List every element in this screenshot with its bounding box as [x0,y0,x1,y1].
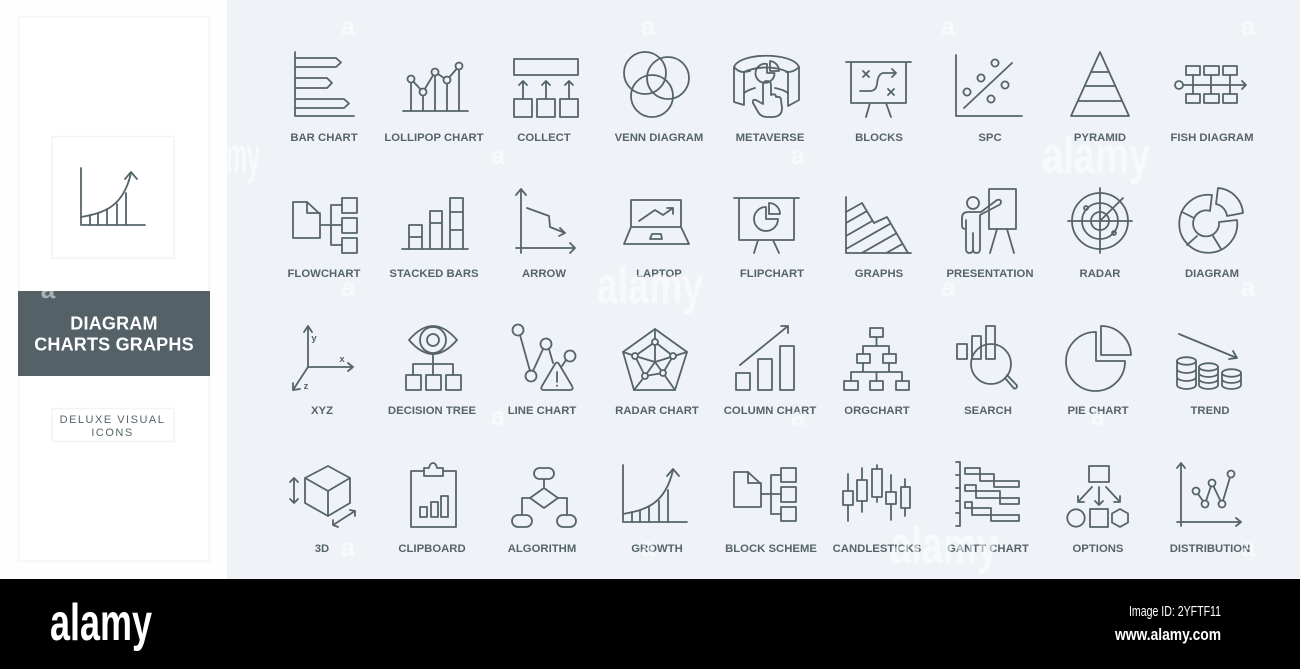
icon: trend [1177,334,1241,417]
icon: pyramid: PYRAMID [1074,132,1126,144]
watermark overlay: a [1091,401,1106,431]
icon: xyz: XYZ [311,405,333,417]
icon: flowchart [288,198,361,280]
icon: spc: SPC [978,132,1002,144]
icon: growth: GROWTH [631,543,683,555]
icon: fish diagram [1170,66,1254,144]
icon: venn diagram: VENN DIAGRAM [615,132,703,144]
icon: trend: TREND [1190,405,1230,417]
watermark overlay: a [641,11,656,41]
watermark overlay: a [941,11,956,41]
icon: stacked bars: STACKED BARS [389,268,479,280]
icon: flipchart [734,198,804,280]
icon: growth [623,465,687,555]
watermark overlay [42,275,1250,552]
watermark overlay: a [491,140,506,170]
icon: xyz: x [339,354,345,365]
icon: stacked bars [389,198,479,280]
icon: xyz: y [311,333,317,344]
website: www.alamy.com [1114,626,1221,644]
icon: collect [514,59,578,144]
icon: orgchart: ORGCHART [844,405,910,417]
watermark overlay: my [226,127,260,185]
subtitle box: ICONS [91,427,134,439]
icon: options [1067,466,1128,555]
subtitle box [52,408,174,442]
icon: collect: COLLECT [517,132,571,144]
subtitle box: DELUXE VISUAL [60,414,165,426]
icon: laptop [624,200,689,280]
icon: distribution [1170,463,1250,555]
watermark overlay: a [1241,532,1256,562]
watermark overlay: a [641,532,656,562]
watermark overlay: a [491,401,506,431]
icon: line chart with warning [508,324,576,417]
icon: arrow: ARROW [522,268,566,280]
icon card: growth chart [52,136,174,258]
icon: arrow [516,189,575,280]
icon: blocks [846,62,911,144]
icon: laptop: LAPTOP [636,268,682,280]
icon: flipchart: FLIPCHART [740,268,804,280]
icon: distribution: DISTRIBUTION [1170,543,1250,555]
icon: block scheme [725,468,817,555]
icon: graphs: GRAPHS [855,268,904,280]
icon: search [957,326,1017,417]
icon: options: OPTIONS [1073,543,1124,555]
icon: radar: RADAR [1080,268,1120,280]
image id: Image ID: 2YFTF11 [1129,604,1221,620]
watermark overlay: a [1241,272,1256,302]
icon: candlesticks: CANDLESTICKS [833,543,922,555]
footer logo: alamy [50,594,152,652]
icon: xyz: z [304,381,309,392]
icon: venn diagram [615,52,703,144]
watermark overlay: a [1241,11,1256,41]
icon: decision tree [388,326,477,417]
title band: DIAGRAM [70,314,158,334]
icon: lollipop chart: LOLLIPOP CHART [384,132,484,144]
watermark overlay: a [341,272,356,302]
icon: blocks: BLOCKS [855,132,903,144]
icon: orgchart [844,328,910,417]
icon: column chart: COLUMN CHART [724,405,816,417]
icon: 3d: 3D [315,543,329,555]
icon: gantt chart [947,462,1029,555]
icon: algorithm [508,468,576,555]
watermark overlay: a [791,140,806,170]
icon: block scheme: BLOCK SCHEME [725,543,817,555]
icon: graphs [845,196,912,277]
icon: metaverse: METAVERSE [736,132,805,144]
watermark overlay: a [341,532,356,562]
icon: pie chart [1066,326,1131,417]
icon: metaverse [734,56,805,144]
icon: line chart with warning: LINE CHART [508,405,576,417]
icon: flowchart: FLOWCHART [288,268,361,280]
icon: algorithm: ALGORITHM [508,543,576,555]
icon: search: SEARCH [964,405,1012,417]
title band: CHARTS GRAPHS [34,334,194,354]
icon: lollipop chart [384,62,484,144]
icon: column chart [724,326,816,417]
watermark overlay: alamy [1042,127,1150,185]
icon: candlesticks [833,465,922,555]
icon: xyz [293,326,353,417]
icon: spc [956,55,1022,144]
watermark overlay: a [941,272,956,302]
watermark overlay: alamy [890,517,998,575]
icon: clipboard [398,463,466,555]
icon: decision tree: DECISION TREE [388,405,477,417]
panel: left sidebar [0,0,227,579]
icon: fish diagram: FISH DIAGRAM [1170,132,1254,144]
title band [18,291,210,376]
footer bar [0,579,1300,669]
watermark overlay: a [341,11,356,41]
icon: diagram: DIAGRAM [1185,268,1239,280]
icon: clipboard: CLIPBOARD [398,543,466,555]
icon: 3d [290,466,355,555]
icon: gantt chart: GANTT CHART [947,543,1029,555]
icon: presentation [946,189,1034,280]
icon: radar [1068,188,1132,280]
watermark overlay: alamy [597,257,703,315]
icon: bar chart: BAR CHART [290,132,358,144]
icon: radar chart: RADAR CHART [615,405,699,417]
icon: presentation: PRESENTATION [946,268,1034,280]
icon: radar chart [615,329,699,417]
icon: pie chart: PIE CHART [1067,405,1129,417]
icon: diagram [1179,188,1243,280]
icon: pyramid [1071,52,1129,144]
icon: bar chart [290,52,358,144]
watermark overlay: a [41,274,56,304]
watermark overlay: a [791,401,806,431]
